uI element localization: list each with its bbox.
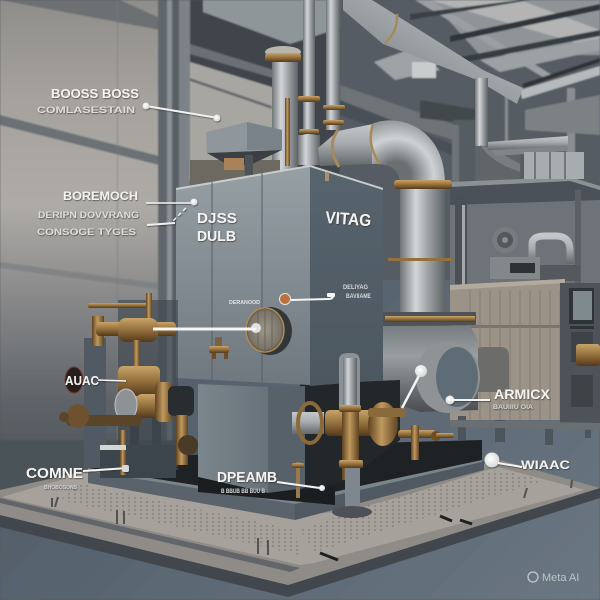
callout: boiler top label: COMLASESTAIN: [37, 105, 135, 116]
label: VITAG: VITAG: [325, 208, 372, 230]
base tray: [88, 440, 484, 520]
callout: COMNE: [26, 465, 129, 491]
callout: AUAC: AUAC: [65, 373, 100, 388]
callout: ARMICX: BAUIIIU OIA: [493, 405, 534, 411]
callout: orange indicator and side text: BAVIIAME: [346, 294, 371, 300]
right machine: beige cabinet: [450, 279, 600, 445]
gauge on box: [246, 307, 292, 355]
left valve assembly: [59, 293, 198, 478]
large horizontal cylinder: [383, 312, 480, 413]
callout: boiler top label: [37, 87, 220, 122]
main box: lower section: [198, 380, 400, 505]
callout: WIAAC: [484, 452, 570, 472]
callout: DPEAMB: DPEAMB: [217, 470, 277, 486]
callout: ARMICX: ARMICX: [494, 386, 551, 402]
overhead duct: [343, 0, 568, 172]
watermark: Meta AI: Meta AI: [542, 572, 579, 584]
large elbow pipe: [318, 120, 453, 312]
central brass valve and pedestal: [292, 353, 454, 518]
callout: ARMICX: [446, 386, 551, 411]
callout line to gauge: [153, 328, 256, 330]
callout: orange indicator and side text: DERANOOD: [229, 300, 260, 306]
callout: AUAC: [65, 373, 126, 388]
label: DJSS DULB: DULB: [197, 228, 236, 245]
callout: mid-left label: [37, 191, 198, 238]
main box: upper section: [176, 165, 383, 386]
label: DJSS DULB: [197, 210, 237, 245]
callout: COMNE: BHOBOSONS: [44, 485, 77, 491]
callout: WIAAC: WIAAC: [521, 458, 570, 472]
callout: orange indicator and side text: [229, 285, 371, 306]
callout: DPEAMB: B BBUB BB BUU B: [221, 489, 266, 495]
label: DJSS DULB: DJSS: [197, 210, 237, 227]
callout: mid-left label: DERIPN DOVVRANG: [38, 210, 139, 221]
callout: orange indicator and side text: DELIYAG: [343, 285, 368, 291]
background: ceiling trusses and upper right structure: [340, 0, 600, 280]
small brass latch: [209, 337, 229, 359]
right machine: upper platform with fan: [450, 152, 600, 290]
vent box: [190, 122, 282, 186]
callout: mid-left label: CONSOGE TYGES: [37, 227, 136, 238]
callout: mid-left label: BOREMOCH: [63, 191, 138, 203]
callout: COMNE: COMNE: [26, 466, 83, 482]
stack pipe and thin vertical pipes: [265, 0, 345, 180]
perforated floor grating: [52, 470, 572, 560]
platform floor slab: [0, 460, 600, 597]
callout: DPEAMB: [217, 470, 325, 495]
callout: cylinder pointer: [402, 365, 427, 408]
callout: boiler top label: BOOSS BOSS: [51, 87, 139, 101]
